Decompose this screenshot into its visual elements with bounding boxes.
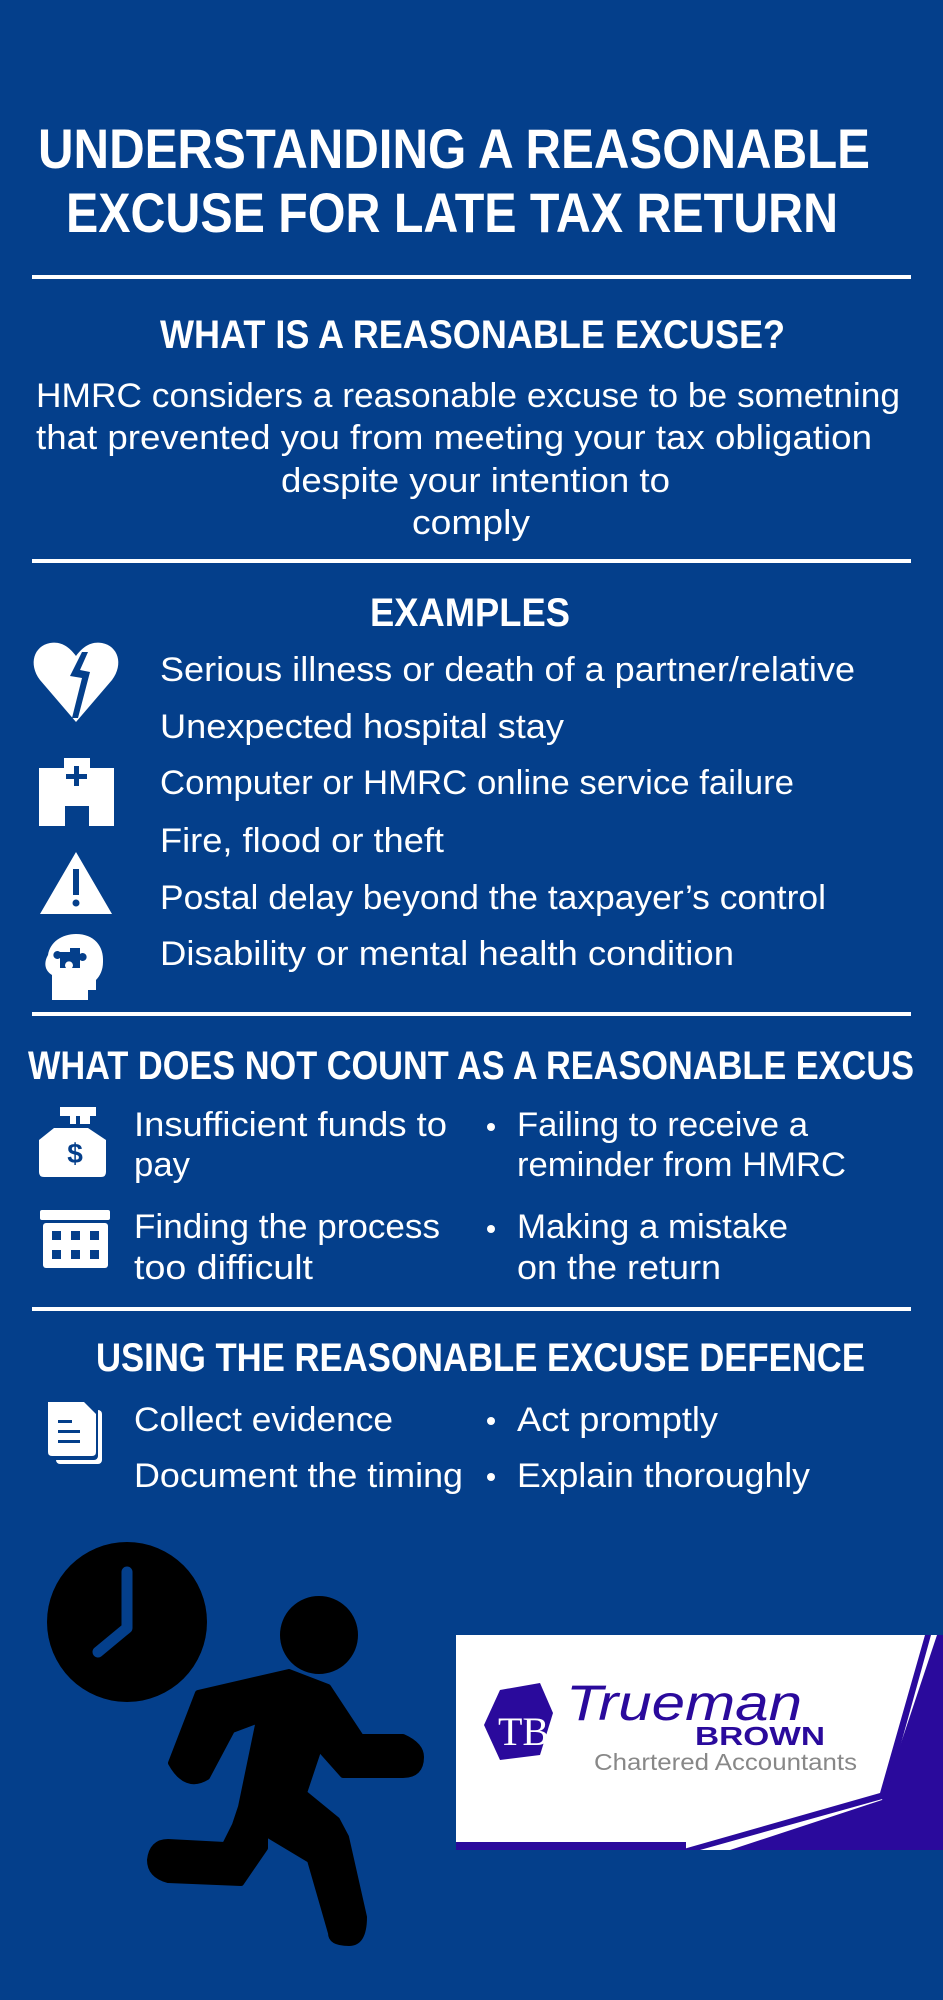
panel: not reasonable excuses: Finding the process bbox=[134, 1208, 440, 1246]
panel: examples list: Computer or HMRC online service failure bbox=[160, 764, 794, 802]
icon: calendar bbox=[40, 1210, 110, 1268]
logo: Trueman Brown: Trueman bbox=[566, 1675, 802, 1731]
text block: definition: comply bbox=[412, 504, 530, 542]
heading: examples: EXAMPLES bbox=[370, 591, 570, 635]
icon: clock bbox=[47, 1542, 207, 1702]
text block: definition: HMRC considers a reasonable excuse to be sometning bbox=[36, 377, 900, 415]
text block: definition: that prevented you from meeting your tax obligation bbox=[36, 419, 872, 457]
panel: defence steps: Explain thoroughly bbox=[517, 1457, 810, 1495]
icon: warning bbox=[40, 852, 112, 914]
panel: not reasonable excuses: Insufficient funds to bbox=[134, 1106, 447, 1144]
panel: examples list: Postal delay beyond the taxpayer’s control bbox=[160, 879, 826, 917]
panel: defence steps: Document the timing bbox=[134, 1457, 463, 1495]
icon: broken heart bbox=[34, 643, 118, 722]
panel: examples list bbox=[34, 643, 855, 1000]
panel: not reasonable excuses: pay bbox=[134, 1146, 190, 1184]
panel: not reasonable excuses: reminder from HMRC bbox=[517, 1146, 846, 1184]
panel: examples list: Disability or mental health condition bbox=[160, 935, 734, 973]
logo: Trueman Brown: Chartered Accountants bbox=[594, 1749, 857, 1775]
icon: documents bbox=[48, 1402, 102, 1464]
heading: what is a reasonable excuse: WHAT IS A REASONABLE EXCUSE? bbox=[160, 313, 785, 357]
panel: examples list: Serious illness or death of a partner/relative bbox=[160, 651, 855, 689]
panel: examples list: Fire, flood or theft bbox=[160, 822, 445, 860]
icon: head with puzzle bbox=[45, 934, 103, 1000]
panel: not reasonable excuses: Making a mistake bbox=[517, 1208, 788, 1246]
icon: hospital bbox=[39, 758, 114, 826]
panel: defence steps: Act promptly bbox=[517, 1401, 718, 1439]
text block: definition: despite your intention to bbox=[281, 462, 670, 500]
logo: Trueman Brown: TB bbox=[498, 1709, 549, 1754]
icon: running person bbox=[150, 1599, 421, 1943]
panel: not reasonable excuses: too difficult bbox=[134, 1249, 314, 1287]
icon: money bag bbox=[39, 1107, 106, 1177]
panel: examples list: Unexpected hospital stay bbox=[160, 708, 564, 746]
icon: money bag: $ bbox=[67, 1138, 83, 1169]
title bbox=[38, 117, 870, 244]
panel: defence steps: Collect evidence bbox=[134, 1401, 393, 1439]
logo: Trueman Brown bbox=[456, 1635, 943, 1850]
panel: not reasonable excuses: on the return bbox=[517, 1249, 721, 1287]
panel: not reasonable excuses: Failing to receive a bbox=[517, 1106, 808, 1144]
text block: definition bbox=[36, 377, 900, 542]
panel: not reasonable excuses bbox=[39, 1106, 846, 1287]
logo: Trueman Brown: BROWN bbox=[695, 1721, 825, 1751]
title: EXCUSE FOR LATE TAX RETURN bbox=[66, 181, 838, 244]
panel: defence steps bbox=[48, 1401, 810, 1495]
